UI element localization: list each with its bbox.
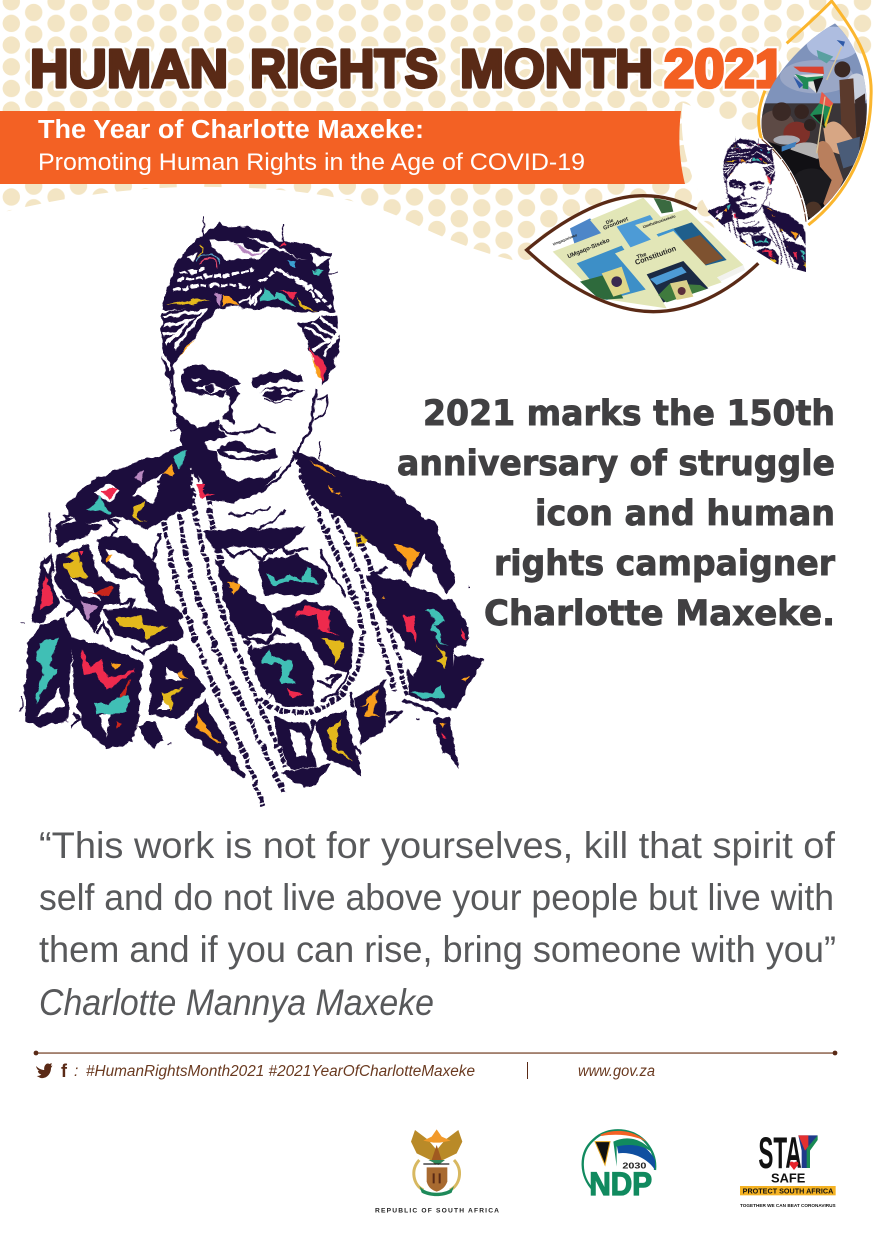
white cutouts in shawl (37, 473, 422, 757)
logo: Stay Safe (740, 1129, 836, 1209)
title: Human Rights Month 2021: RIGHTS (250, 39, 438, 99)
booklet: The Constitution: Constitution (634, 243, 678, 267)
right braids (260, 457, 407, 713)
quote: self and do not live above your people but live with (39, 877, 834, 918)
logo: Stay Safe: SAFE (771, 1171, 805, 1185)
quote: them and if you can rise, bring someone with you” (39, 929, 836, 970)
logo: NDP 2030: NDP (589, 1165, 652, 1202)
booklet: UMgaqo-Siseko: Umgaqosiseko (552, 233, 579, 247)
logo: Stay Safe: PROTECT SOUTH AFRICA (743, 1186, 834, 1195)
booklet: UMgaqo-Siseko: UMgaqo-Siseko (567, 238, 611, 260)
main portrait: Charlotte Maxeke (20, 218, 480, 806)
background: dotted pattern header (0, 0, 874, 300)
booklet: The Constitution (615, 231, 722, 304)
banner: orange subtitle strip (0, 111, 685, 184)
logo: coat of arms (375, 1129, 499, 1215)
website: www.gov.za (578, 1063, 655, 1080)
quote attribution: Charlotte Mannya Maxeke (39, 982, 434, 1023)
white leaf behind small portrait (682, 103, 807, 271)
booklet: Die Grondwet (590, 198, 661, 248)
mouth (217, 441, 277, 461)
booklet: UMgaqo-Siseko (552, 228, 667, 308)
government label: REPUBLIC OF SOUTH AFRICA (375, 1208, 499, 1215)
left eye socket (180, 365, 243, 397)
SA flag one (793, 67, 824, 93)
neck lines (228, 505, 285, 531)
logo: NDP 2030: 2030 (622, 1161, 647, 1171)
jagged shawl linework (40, 513, 437, 757)
shawl colour bolts (63, 552, 88, 578)
icon: facebook: f (61, 1061, 68, 1081)
statement text: rights campaigner (494, 544, 836, 584)
face outline (172, 367, 316, 493)
small portrait on white leaf (708, 136, 806, 272)
banner heading: The Year of Charlotte Maxeke: (38, 116, 424, 144)
statement text (397, 394, 836, 634)
statement text: anniversary of struggle (397, 444, 835, 484)
quote: “This work is not for yourselves, kill that spirit of (39, 825, 836, 866)
portrait shoulders and shawl (27, 447, 480, 806)
yellow leaf outline (759, 1, 871, 225)
icon: twitter (36, 1063, 52, 1078)
crowd photo (762, 24, 867, 220)
nostril line (219, 426, 277, 434)
footer social line (36, 1061, 655, 1081)
title: Human Rights Month 2021: HUMAN (30, 39, 228, 99)
statement text: Charlotte Maxeke. (484, 594, 835, 634)
nose bridge (222, 387, 239, 423)
ear (315, 396, 327, 419)
booklet: Umthethosisekelo: Umthethosisekelo (642, 213, 677, 229)
title: Human Rights Month 2021 (30, 39, 785, 99)
shawl dark patches (27, 447, 480, 785)
facial shadow (175, 410, 283, 503)
book leaf: constitution booklets (527, 196, 758, 312)
right eye (259, 385, 305, 401)
statement text: icon and human (535, 494, 835, 534)
logo: NDP 2030 (583, 1130, 655, 1202)
logo: Stay Safe: TOGETHER WE CAN BEAT CORONAVIRUS (740, 1203, 836, 1209)
left braids (160, 460, 287, 806)
banner subheading: Promoting Human Rights in the Age of COVID-19 (38, 149, 585, 176)
right wrap panel (298, 314, 339, 387)
statement text: 2021 marks the 150th (423, 394, 835, 434)
booklet: Umthethosisekelo (635, 209, 745, 282)
brown leaf outline (527, 196, 758, 312)
booklet: The Constitution: The (636, 252, 647, 261)
title: Human Rights Month 2021: MONTH (460, 39, 653, 99)
portrait head and headwrap (162, 223, 339, 503)
left wrap panel (162, 307, 218, 387)
right brow (252, 371, 303, 387)
sparkle lines around portrait (20, 218, 468, 744)
booklet: Die Grondwet: Grondwet (603, 216, 629, 232)
photo leaf: crowd with flags (757, 1, 871, 233)
footer rule (34, 1051, 837, 1055)
footer social line: #HumanRightsMonth2021 #2021YearOfCharlotteMaxeke (86, 1063, 475, 1080)
quote (39, 825, 836, 1023)
booklets (552, 198, 745, 308)
hashtags: : (74, 1063, 78, 1080)
booklet: Die Grondwet: Die (605, 218, 615, 226)
logo: Stay Safe: STA (758, 1129, 802, 1178)
SA flag two (810, 92, 833, 128)
headwrap (163, 223, 335, 313)
title: Human Rights Month 2021: 2021 (664, 39, 785, 99)
